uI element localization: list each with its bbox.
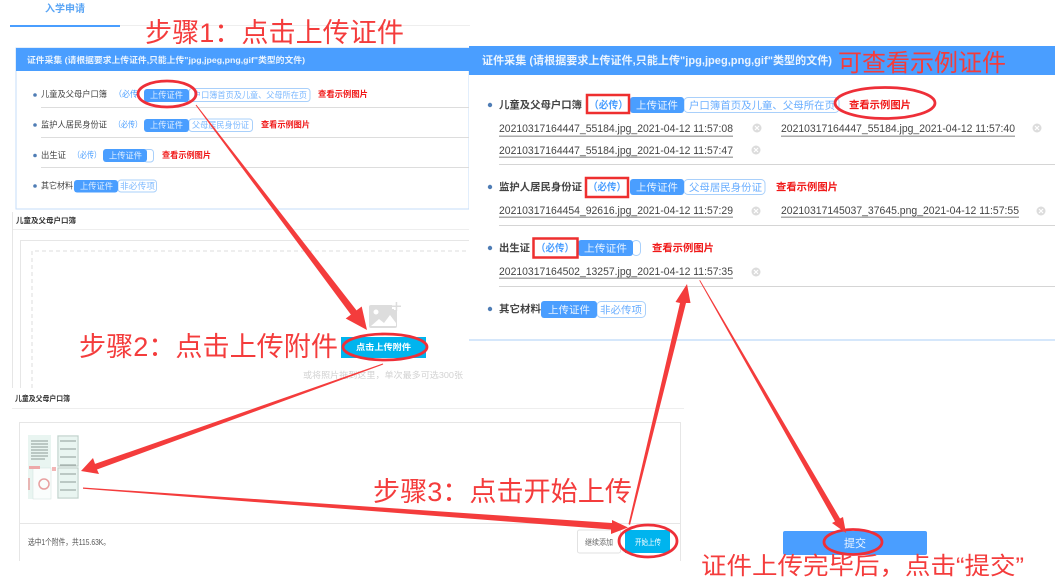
right row: household register: 上传证件 <box>636 100 678 112</box>
button: continue adding <box>578 530 620 553</box>
highlight: red boxes around required marks <box>534 95 629 258</box>
left row: other materials: 非必传项 <box>120 181 155 191</box>
button: start upload: 开始上传 <box>635 537 661 547</box>
heading: final submit note: 证件上传完毕后，点击“提交” <box>701 553 1024 580</box>
left row: other materials: 其它材料 <box>41 180 74 190</box>
icon: add image <box>369 302 401 328</box>
right row: household register: 20210317164447_55184.jpg_2021-04-12 11:57:08 <box>499 123 733 135</box>
left row: guardian ID: （必传） <box>114 120 142 130</box>
right row: guardian ID: 20210317145037_37645.png_2021-04-12 11:57:55 <box>781 205 1019 217</box>
thumbnail: household register scan <box>28 435 79 499</box>
right row: guardian ID: 查看示例图片 <box>776 180 838 194</box>
right row: other materials: 其它材料 <box>499 302 542 316</box>
right row: birth certificate: 查看示例图片 <box>652 242 714 254</box>
right row: guardian ID: 监护人居民身份证 <box>499 180 582 194</box>
right row: household register: 20210317164447_55184.jpg_2021-04-12 11:57:47 <box>499 145 733 157</box>
panel: left certificate form <box>16 48 469 209</box>
right row: guardian ID: 20210317164454_92616.jpg_2021-04-12 11:57:29 <box>499 205 733 217</box>
tab: 入学申请: 入学申请 <box>45 2 85 15</box>
selected file summary: 选中1个附件，共115.63K。 <box>28 537 110 547</box>
left panel header: 证件采集 (请根据要求上传证件,只能上传"jpg,jpeg,png,gif"类型的文件) <box>27 55 305 65</box>
left row: birth certificate: 查看示例图片 <box>162 150 211 160</box>
panel: attachment drop zone <box>12 212 469 388</box>
left row: household register: 上传证件 <box>150 90 183 100</box>
button: upload attachment <box>341 337 426 358</box>
left row: other materials: 上传证件 <box>80 181 113 191</box>
arrow: start upload to file list <box>628 284 690 525</box>
right row: household register: 户口簿首页及儿童、父母所在页 <box>689 99 835 112</box>
button: upload attachment: 点击上传附件 <box>356 342 412 352</box>
arrow: file list to submit <box>699 280 846 533</box>
panel: right certificate form <box>469 46 1055 341</box>
left row: other materials <box>33 180 157 192</box>
heading: step 1: 步骤1：点击上传证件 <box>145 18 404 48</box>
right row: guardian ID: 父母居民身份证 <box>689 181 762 194</box>
heading: sample certificates note: 可查看示例证件 <box>838 50 1006 77</box>
right row: other materials: 上传证件 <box>548 304 590 316</box>
arrow: step 1 to step 2 <box>196 105 367 330</box>
right row: other materials: 非必传项 <box>600 304 642 316</box>
button: submit: 提交 <box>844 536 866 550</box>
right row: household register: （必传） <box>589 98 628 112</box>
left row: household register: （必传 <box>114 89 138 99</box>
button: submit <box>783 531 927 555</box>
right row: household register: 查看示例图片 <box>849 98 911 112</box>
right panel header <box>469 46 1055 75</box>
right row: birth certificate: 出生证 <box>499 242 530 254</box>
left row: household register: 户口簿首页及儿童、父母所在页 <box>193 90 307 100</box>
right row: guardian ID: （必传） <box>588 180 626 194</box>
left row: guardian ID: 监护人居民身份证 <box>41 120 107 130</box>
panel: attachment drop zone: 儿童及父母户口簿 <box>16 215 76 225</box>
left row: birth certificate: 上传证件 <box>109 150 142 160</box>
right row: guardian ID: 上传证件 <box>636 182 678 194</box>
right row: birth certificate: （必传） <box>536 242 574 254</box>
heading: step 3: 步骤3：点击开始上传 <box>373 477 632 507</box>
right row: birth certificate <box>488 240 1055 287</box>
button: continue adding: 继续添加 <box>585 537 613 547</box>
left row: birth certificate: 出生证 <box>41 150 66 160</box>
right row: birth certificate: 上传证件 <box>584 243 627 255</box>
left row: household register: 查看示例图片 <box>318 89 368 99</box>
right row: birth certificate: 20210317164502_13257.jpg_2021-04-12 11:57:35 <box>499 266 733 278</box>
panel: selected attachments: 儿童及父母户口簿 <box>15 393 70 403</box>
button: start upload <box>625 530 670 553</box>
left row: guardian ID: 上传证件 <box>150 120 183 130</box>
panel: selected attachments <box>12 388 684 564</box>
left row: guardian ID: 查看示例图片 <box>261 120 310 130</box>
highlight: red ellipses <box>138 81 935 557</box>
left row: birth certificate: （必传） <box>73 150 101 160</box>
right panel header: 证件采集 (请根据要求上传证件,只能上传"jpg,jpeg,png,gif"类型的文件) <box>482 53 832 67</box>
arrow: step 2 to thumbnail <box>81 364 383 474</box>
left row: birth certificate <box>33 149 469 168</box>
left row: household register <box>33 88 469 108</box>
hint text: 或将照片拖到这里，单次最多可选300张 <box>303 370 464 380</box>
right row: household register <box>488 97 1055 165</box>
left row: guardian ID: 父母居民身份证 <box>192 120 249 130</box>
right row: other materials <box>488 301 646 318</box>
right row: guardian ID <box>488 179 1055 226</box>
right row: household register: 儿童及父母户口簿 <box>499 98 582 112</box>
arrow: thumbnail to start upload <box>83 488 628 534</box>
right row: household register: 20210317164447_55184.jpg_2021-04-12 11:57:40 <box>781 123 1015 135</box>
left panel header <box>16 48 469 71</box>
heading: step 2: 步骤2：点击上传附件 <box>79 332 338 362</box>
left row: guardian ID <box>33 119 469 138</box>
left row: household register: 儿童及父母户口簿 <box>41 89 107 99</box>
